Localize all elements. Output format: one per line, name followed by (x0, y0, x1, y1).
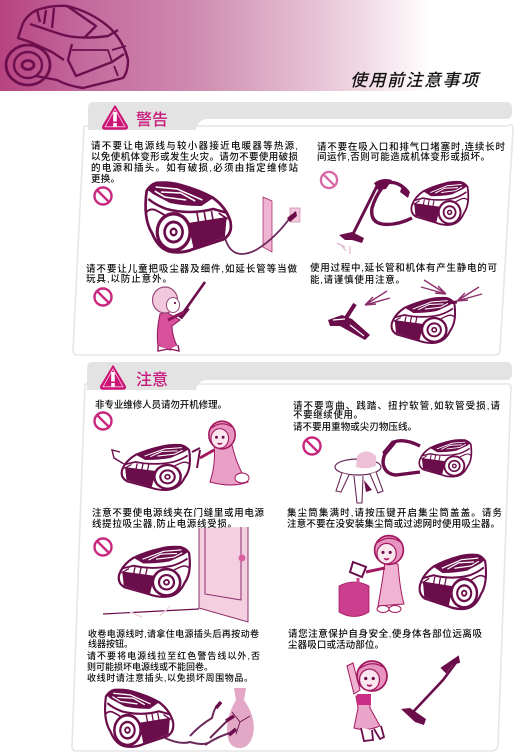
text block: static electricity: 能,请谨慎使用注意。 (310, 274, 405, 286)
text block: hose care: 不要继续使用。 (293, 409, 363, 421)
illustration: vacuum cord striking vase (105, 688, 254, 748)
heading: caution: 注意 (136, 370, 168, 389)
text block: repairs: 非专业维修人员请勿开机修理。 (95, 399, 227, 411)
text block: dust bin (287, 507, 502, 530)
text block: personal safety (288, 628, 482, 651)
text block: door: 线提拉吸尘器,防止电源线受损。 (92, 518, 237, 530)
text block: children (86, 263, 297, 285)
icon: prohibition (94, 538, 112, 556)
illustration: table on hose (335, 440, 471, 503)
text block: dust bin: 集尘筒集满时,请按压键开启集尘筒盖盖。请务 (287, 507, 502, 519)
illustration: woman repairing vacuum (112, 421, 249, 490)
text block: hose care: 请不要用重物或尖刃物压线。 (293, 421, 417, 433)
text block: cords and heat sources: 的电源和插头。如有破损,必须由指定维修站 (91, 162, 298, 174)
text block: cord rewind (87, 628, 260, 683)
icon: vacuum cleaner outline in banner (6, 6, 128, 88)
text block: cord rewind: 则可能损坏电源线或不能回卷。 (87, 661, 213, 672)
text block: hose care (293, 400, 500, 433)
panel: caution (72, 362, 512, 751)
text block: personal safety: 请您注意保护自身安全,使身体各部位远离吸 (288, 628, 482, 640)
text block: cords and heat sources: 请不要让电源线与较小器接近电暖器等热源, (91, 140, 298, 152)
text block: door: 注意不要使电源线夹在门缝里或用电源 (92, 507, 264, 519)
text block: blocked air inlet (317, 141, 505, 163)
icon: prohibition (94, 188, 112, 204)
text block: cord rewind: 收线时请注意插头,以免损坏周围物品。 (87, 672, 253, 683)
icon: prohibition (321, 172, 337, 188)
text block: hose care: 请不要弯曲、践踏、扭拧软管,如软管受损,请 (293, 400, 500, 412)
arrow: hose joint (457, 287, 482, 301)
text block: static electricity (310, 262, 497, 286)
heading: warning: 警告 (136, 111, 168, 129)
text block: cords and heat sources (91, 140, 298, 185)
illustration: child holding wand (152, 282, 205, 351)
text block: personal safety: 尘器吸口或活动部位。 (288, 639, 384, 651)
text block: cords and heat sources: 更换。 (91, 173, 120, 185)
icon: prohibition (304, 438, 320, 454)
icon: warning triangle (103, 106, 127, 129)
illustration: vacuum with hose and nozzle (337, 179, 468, 254)
arrow: body (421, 280, 446, 294)
icon: warning triangle (101, 366, 125, 389)
header banner (0, 0, 481, 91)
illustration: woman emptying dust bin (339, 536, 486, 616)
title: 使用前注意事项 (350, 71, 481, 90)
text block: static electricity: 使用过程中,延长管和机体有产生静电的可 (310, 262, 497, 274)
text block: children: 请不要让儿童把吸尘器及细件,如延长管等当做 (86, 263, 297, 275)
illustration: static nozzle and vacuum with arrows (328, 280, 482, 343)
text block: cord rewind: 请不要将电源线拉至红色警告线以外,否 (87, 650, 260, 661)
text block: cord rewind: 收卷电源线时,请拿住电源插头后再按动卷 (88, 628, 259, 639)
text block: dust bin: 注意不要在没安装集尘筒或过滤网时使用吸尘器。 (287, 518, 500, 530)
illustration: door and vacuum (103, 527, 248, 622)
text block: blocked air inlet: 间运作,否则可能造成机体变形或损坏。 (317, 151, 490, 163)
icon: prohibition (94, 288, 112, 306)
illustration: vacuum with damaged cord at wall socket (146, 183, 300, 254)
text block: cords and heat sources: 以免使机体变形或发生火灾。请勿不要使用破损 (91, 151, 298, 163)
text block: blocked air inlet: 请不要在吸入口和排气口堵塞时,连续长时 (317, 141, 505, 153)
arrow: nozzle (365, 291, 390, 305)
panel: warning (73, 102, 513, 355)
text block: door (92, 507, 264, 530)
illustration: girl and upright wand (347, 657, 459, 741)
icon: prohibition (94, 412, 112, 430)
text block: children: 玩具,以防止意外。 (86, 273, 172, 285)
text block: cord rewind: 线器按钮。 (88, 638, 133, 649)
